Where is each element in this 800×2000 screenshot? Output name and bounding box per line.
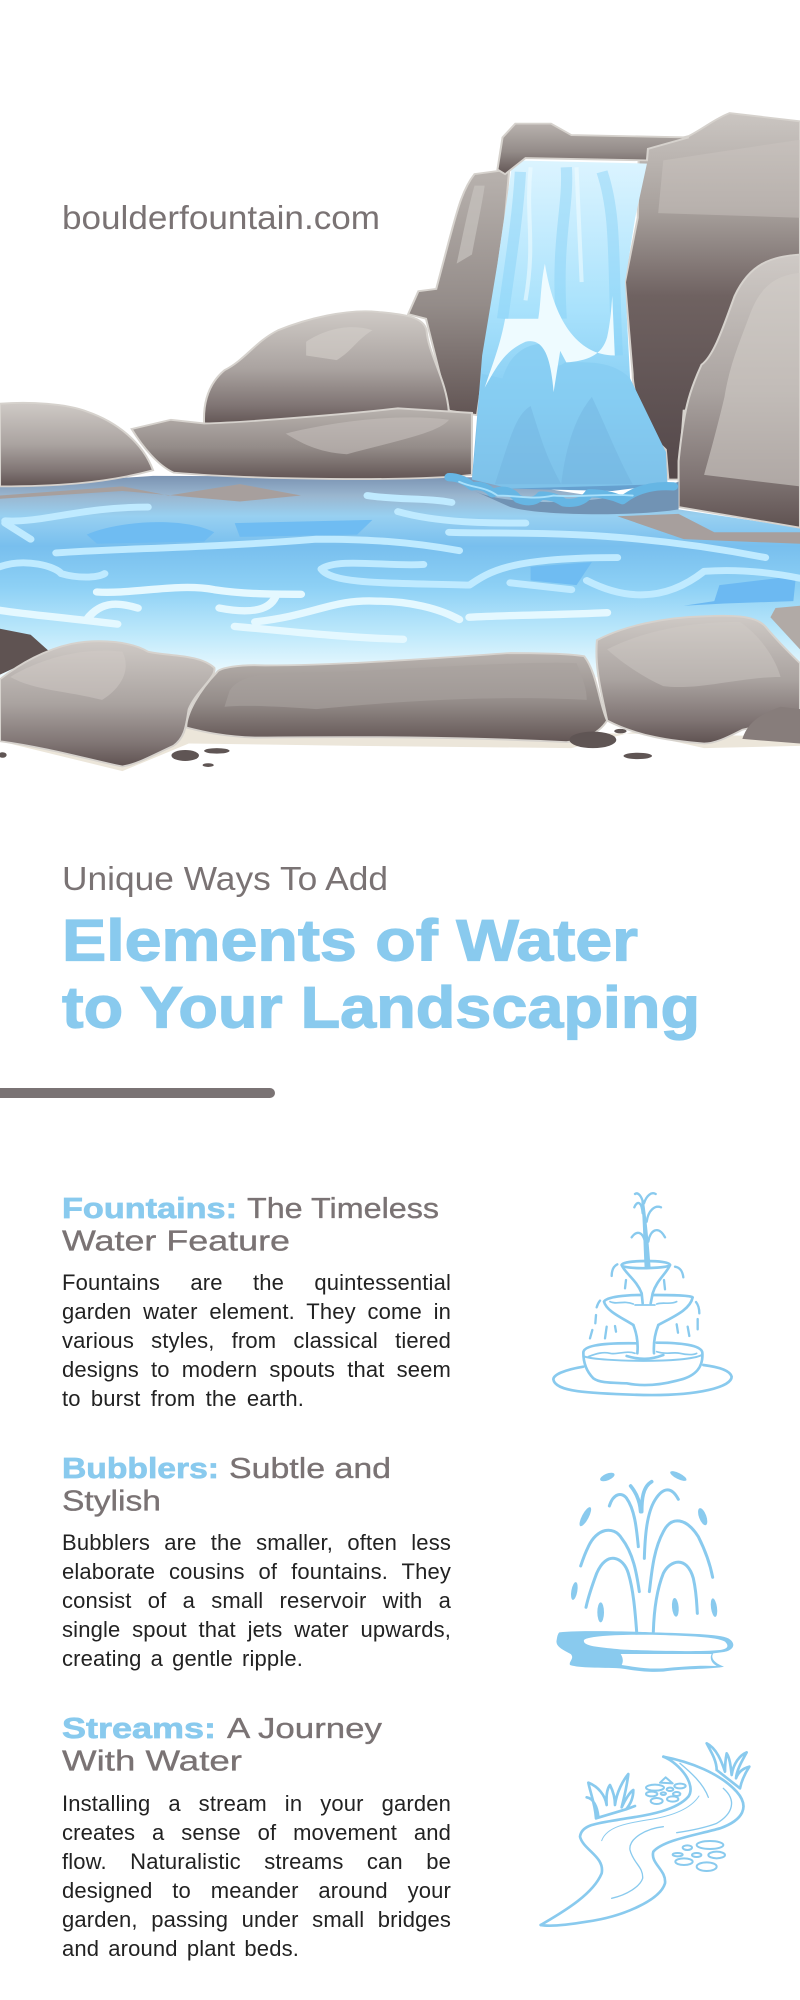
heading: bubblers: Subtle and (229, 1453, 391, 1485)
waterfall foam (449, 477, 679, 514)
body text: fountains: various styles, from classical tiered (62, 1328, 451, 1353)
upper lip rock (497, 124, 689, 174)
shore sand (0, 723, 800, 771)
body text: fountains: designs to modern spouts that seem (62, 1357, 451, 1382)
body text: streams: and around plant beds. (62, 1936, 299, 1961)
heading: fountains: Water Feature (62, 1226, 290, 1258)
heading: bubblers: Bubblers: (62, 1453, 219, 1485)
small right rock (742, 707, 800, 744)
flat ledge rock (132, 408, 472, 479)
divider bar (0, 1088, 275, 1098)
top right small rock (770, 606, 800, 649)
panel: streams (62, 1713, 451, 1961)
bottom middle rock (186, 653, 607, 742)
body text: streams: designed to meander around your (62, 1878, 451, 1903)
body text: bubblers: single spout that jets water upwards, (62, 1617, 451, 1642)
panel: bubblers (62, 1453, 451, 1671)
front right rock (679, 254, 800, 528)
left back cliff (408, 170, 509, 415)
body text: bubblers (62, 1530, 451, 1671)
body text: streams: flow. Naturalistic streams can be (62, 1849, 451, 1874)
heading: fountains: The Timeless (247, 1193, 439, 1225)
heading: fountains: Fountains: (62, 1193, 237, 1225)
heading: bubblers (62, 1453, 391, 1518)
icon: stream (539, 1742, 751, 1927)
body text: fountains: Fountains are the quintessential (62, 1270, 451, 1295)
body text: bubblers: Bubblers are the smaller, often less (62, 1530, 451, 1555)
bottom left boulder (0, 641, 215, 766)
panel: fountains (62, 1193, 451, 1411)
body text: streams: creates a sense of movement and (62, 1820, 451, 1845)
body text: streams: garden, passing under small bridges (62, 1907, 451, 1932)
heading: bubblers: Stylish (62, 1486, 161, 1518)
waterfall (472, 160, 667, 491)
pebbles (0, 729, 652, 767)
title: Elements of Water (62, 908, 638, 974)
title: to Your Landscaping (62, 976, 700, 1040)
pond water (0, 476, 800, 677)
far left dark rock (0, 629, 49, 675)
hero illustration: waterfall and pond (0, 112, 800, 771)
back right cliff (625, 113, 800, 479)
body text: fountains: to burst from the earth. (62, 1386, 304, 1411)
heading: streams: A Journey (227, 1713, 383, 1745)
heading: streams (62, 1713, 383, 1778)
bottom right boulder (596, 616, 800, 744)
body text: fountains (62, 1270, 451, 1411)
left shore rock (0, 403, 153, 486)
heading: fountains (62, 1193, 439, 1258)
title (62, 908, 700, 1041)
subtitle: Unique Ways To Add (62, 860, 388, 897)
upper boulder (204, 311, 449, 427)
body text: bubblers: elaborate cousins of fountains. They (62, 1559, 451, 1584)
body text: bubblers: creating a gentle ripple. (62, 1646, 303, 1671)
heading: streams: Streams: (62, 1713, 216, 1745)
site url: boulderfountain.com (62, 199, 380, 236)
body text: bubblers: consist of a small reservoir with a (62, 1588, 451, 1613)
icon: tiered fountain (552, 1192, 733, 1396)
icon: bubbler (556, 1471, 734, 1672)
body text: streams (62, 1791, 451, 1961)
body text: streams: Installing a stream in your garden (62, 1791, 451, 1816)
body text: fountains: garden water element. They come in (62, 1299, 451, 1324)
heading: streams: With Water (62, 1746, 242, 1778)
